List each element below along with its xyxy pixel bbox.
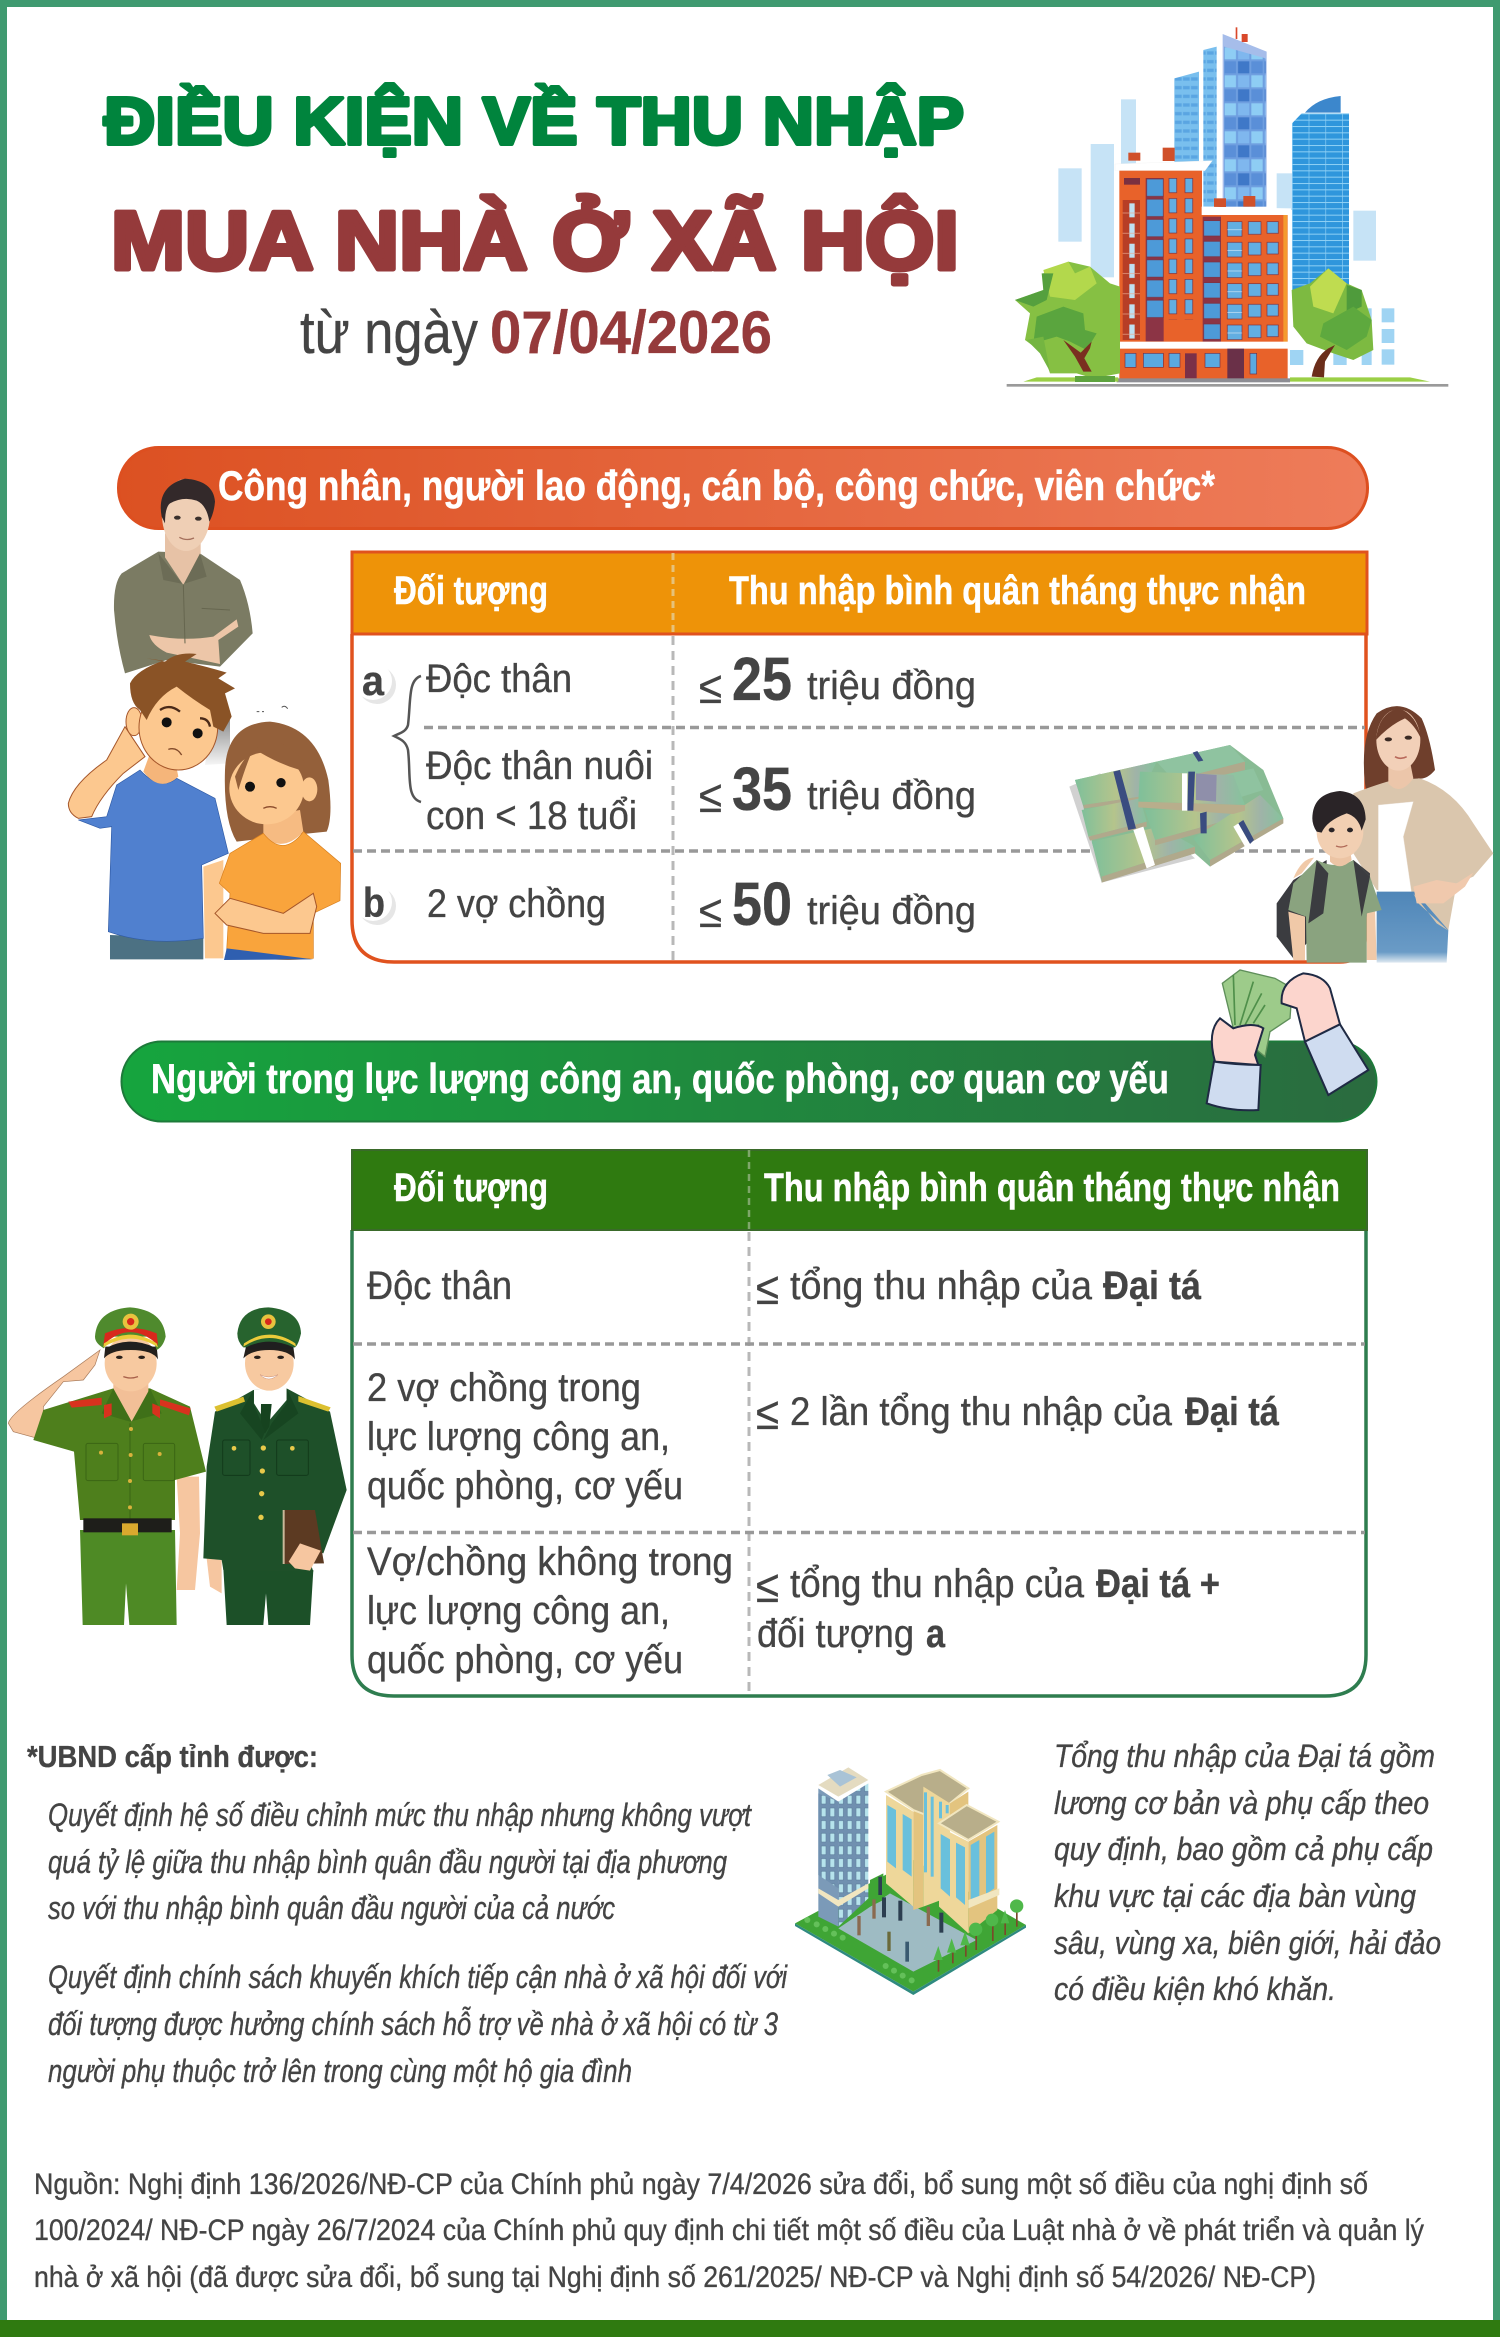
row: single with child: con < 18 tuổi [426, 794, 637, 838]
row: single [367, 1262, 1202, 1314]
row: single with child: 35 [732, 755, 792, 823]
section banner: workers and civil servants: Công nhân, người lao động, cán bộ, công chức, viên chức* [218, 462, 1216, 509]
row: single: Độc thân [426, 657, 572, 701]
courtyard people [857, 1877, 943, 1962]
title [104, 84, 964, 366]
police officer saluting [8, 1307, 206, 1625]
boy [68, 654, 235, 959]
right tree [1292, 268, 1373, 377]
blue tower [818, 1767, 868, 1927]
note: colonel total income: khu vực tại các địa bàn vùng [1054, 1878, 1416, 1914]
section banner: police and defence forces [122, 1042, 1376, 1122]
row: single: ≤ [756, 1262, 779, 1314]
shadow under man [205, 720, 230, 765]
left tree [1015, 262, 1120, 382]
row: single: tổng thu nhập của [790, 1264, 1093, 1308]
table header: Đối tượng [394, 1166, 548, 1210]
badge a [354, 657, 396, 704]
table: workers income limits [352, 552, 1367, 962]
footnote heading: *UBND cấp tỉnh được: [27, 1739, 318, 1774]
note: colonel total income: có điều kiện khó khăn. [1054, 1971, 1336, 2007]
row: spouse outside forces: quốc phòng, cơ yếu [367, 1638, 683, 1682]
illustration: city buildings and trees [1007, 27, 1448, 387]
row: couple [427, 870, 976, 938]
footnote item 1: quá tỷ lệ giữa thu nhập bình quân đầu người tại địa phương [48, 1844, 727, 1880]
badge b: b [363, 879, 385, 926]
left red block [1115, 148, 1212, 347]
row: couple: ≤ [699, 885, 722, 937]
row: single: Đại tá [1103, 1264, 1202, 1308]
note: colonel total income: Tổng thu nhập của Đại tá gồm [1054, 1738, 1435, 1774]
row: couple: 2 vợ chồng [427, 882, 606, 926]
table header: Thu nhập bình quân tháng thực nhận [764, 1166, 1340, 1210]
table body frame [352, 634, 1366, 962]
badge b [354, 879, 396, 926]
footnote item 2: người phụ thuộc trở lên trong cùng một hộ gia đình [48, 2053, 632, 2089]
illustration: money bundles [1069, 745, 1283, 883]
row: spouse outside forces: đối tượng [757, 1612, 914, 1656]
soldier with folder [203, 1307, 347, 1625]
footnote item 1: Quyết định hệ số điều chỉnh mức thu nhập nhưng không vượt [48, 1797, 752, 1833]
tan towers [886, 1770, 999, 1933]
brace [394, 676, 421, 802]
row: couple in forces: 2 vợ chồng trong [367, 1366, 641, 1410]
source note: nhà ở xã hội (đã được sửa đổi, bổ sung tại Nghị định số 261/2025/ NĐ-CP và Nghị định số 54/2026/ NĐ-CP) [34, 2261, 1316, 2294]
row: couple in forces: lực lượng công an, [367, 1415, 670, 1459]
mother [1353, 706, 1493, 963]
footnote item 2: đối tượng được hưởng chính sách hỗ trợ về nhà ở xã hội có từ 3 [48, 2006, 778, 2042]
row: single [426, 645, 976, 713]
row: single: ≤ [699, 661, 722, 713]
standing man [114, 479, 253, 673]
row: couple in forces [367, 1366, 1280, 1508]
footnote item 1 [48, 1797, 752, 1926]
table header [352, 1150, 1367, 1230]
heading: conditions on income: ĐIỀU KIỆN VỀ THU NHẬP [104, 84, 964, 159]
row: spouse outside forces [367, 1540, 1220, 1682]
note: colonel total income [1054, 1738, 1441, 2007]
effective date: 07/04/2026 [490, 299, 772, 366]
girl [215, 706, 341, 960]
section banner: workers and civil servants [118, 448, 1368, 528]
illustration: isometric housing complex [795, 1767, 1026, 1995]
footnote item 2: Quyết định chính sách khuyến khích tiếp cận nhà ở xã hội đối với [48, 1959, 788, 1995]
table body frame [352, 1230, 1366, 1696]
row: single with child: ≤ [699, 770, 722, 822]
row: single: Độc thân [367, 1264, 512, 1308]
row: spouse outside forces: tổng thu nhập của [790, 1562, 1085, 1606]
footnote item 2 [48, 1959, 788, 2089]
table header [352, 552, 1367, 634]
right red block [1202, 196, 1291, 343]
note: colonel total income: lương cơ bản và phụ cấp theo [1054, 1785, 1429, 1821]
row: spouse outside forces: lực lượng công an, [367, 1589, 670, 1633]
row: single: triệu đồng [807, 664, 976, 708]
row: single with child [426, 744, 976, 838]
row: spouse outside forces: Vợ/chồng không trong [367, 1540, 733, 1584]
row: spouse outside forces: a [926, 1612, 946, 1656]
illustration: mother and child [1277, 706, 1493, 963]
row: couple: triệu đồng [807, 889, 976, 933]
footnote: provincial committee powers [27, 1739, 788, 2089]
table: armed forces income limits [352, 1150, 1367, 1696]
row: couple in forces: 2 lần tổng thu nhập của [790, 1390, 1173, 1434]
icon: hands counting cash [1207, 970, 1368, 1110]
row: couple in forces: Đại tá [1185, 1390, 1280, 1434]
section banner: police and defence forces: Người trong lực lượng công an, quốc phòng, cơ quan cơ yếu [151, 1055, 1169, 1102]
source note: Nguồn: Nghị định 136/2026/NĐ-CP của Chính phủ ngày 7/4/2026 sửa đổi, bổ sung một số điều của nghị định số [34, 2168, 1368, 2201]
row: couple in forces: ≤ [756, 1387, 779, 1439]
row: couple: 50 [732, 870, 792, 938]
child with backpack [1277, 791, 1382, 963]
effective date: từ ngày [300, 299, 478, 366]
row: spouse outside forces: ≤ [756, 1560, 779, 1612]
footnote item 1: so với thu nhập bình quân đầu người của cả nước [48, 1890, 615, 1926]
row: single with child: triệu đồng [807, 774, 976, 818]
badge a: a [362, 657, 385, 704]
note: colonel total income: quy định, bao gồm cả phụ cấp [1054, 1831, 1433, 1867]
row: spouse outside forces: Đại tá + [1096, 1562, 1220, 1606]
roadside trees [804, 1899, 1023, 1983]
table header: Thu nhập bình quân tháng thực nhận [729, 569, 1306, 613]
row: couple in forces: quốc phòng, cơ yếu [367, 1464, 683, 1508]
illustration: police officer and soldier [8, 1307, 347, 1625]
illustration: man, boy and girl worried [68, 479, 341, 960]
note: colonel total income: sâu, vùng xa, biên giới, hải đảo [1054, 1925, 1441, 1961]
table header: Đối tượng [394, 569, 548, 613]
row: single: 25 [732, 645, 792, 713]
source note [34, 2168, 1424, 2294]
effective date [300, 299, 772, 366]
row: single with child: Độc thân nuôi [426, 744, 653, 788]
heading: buying social housing: MUA NHÀ Ở XÃ HỘI [111, 194, 959, 287]
